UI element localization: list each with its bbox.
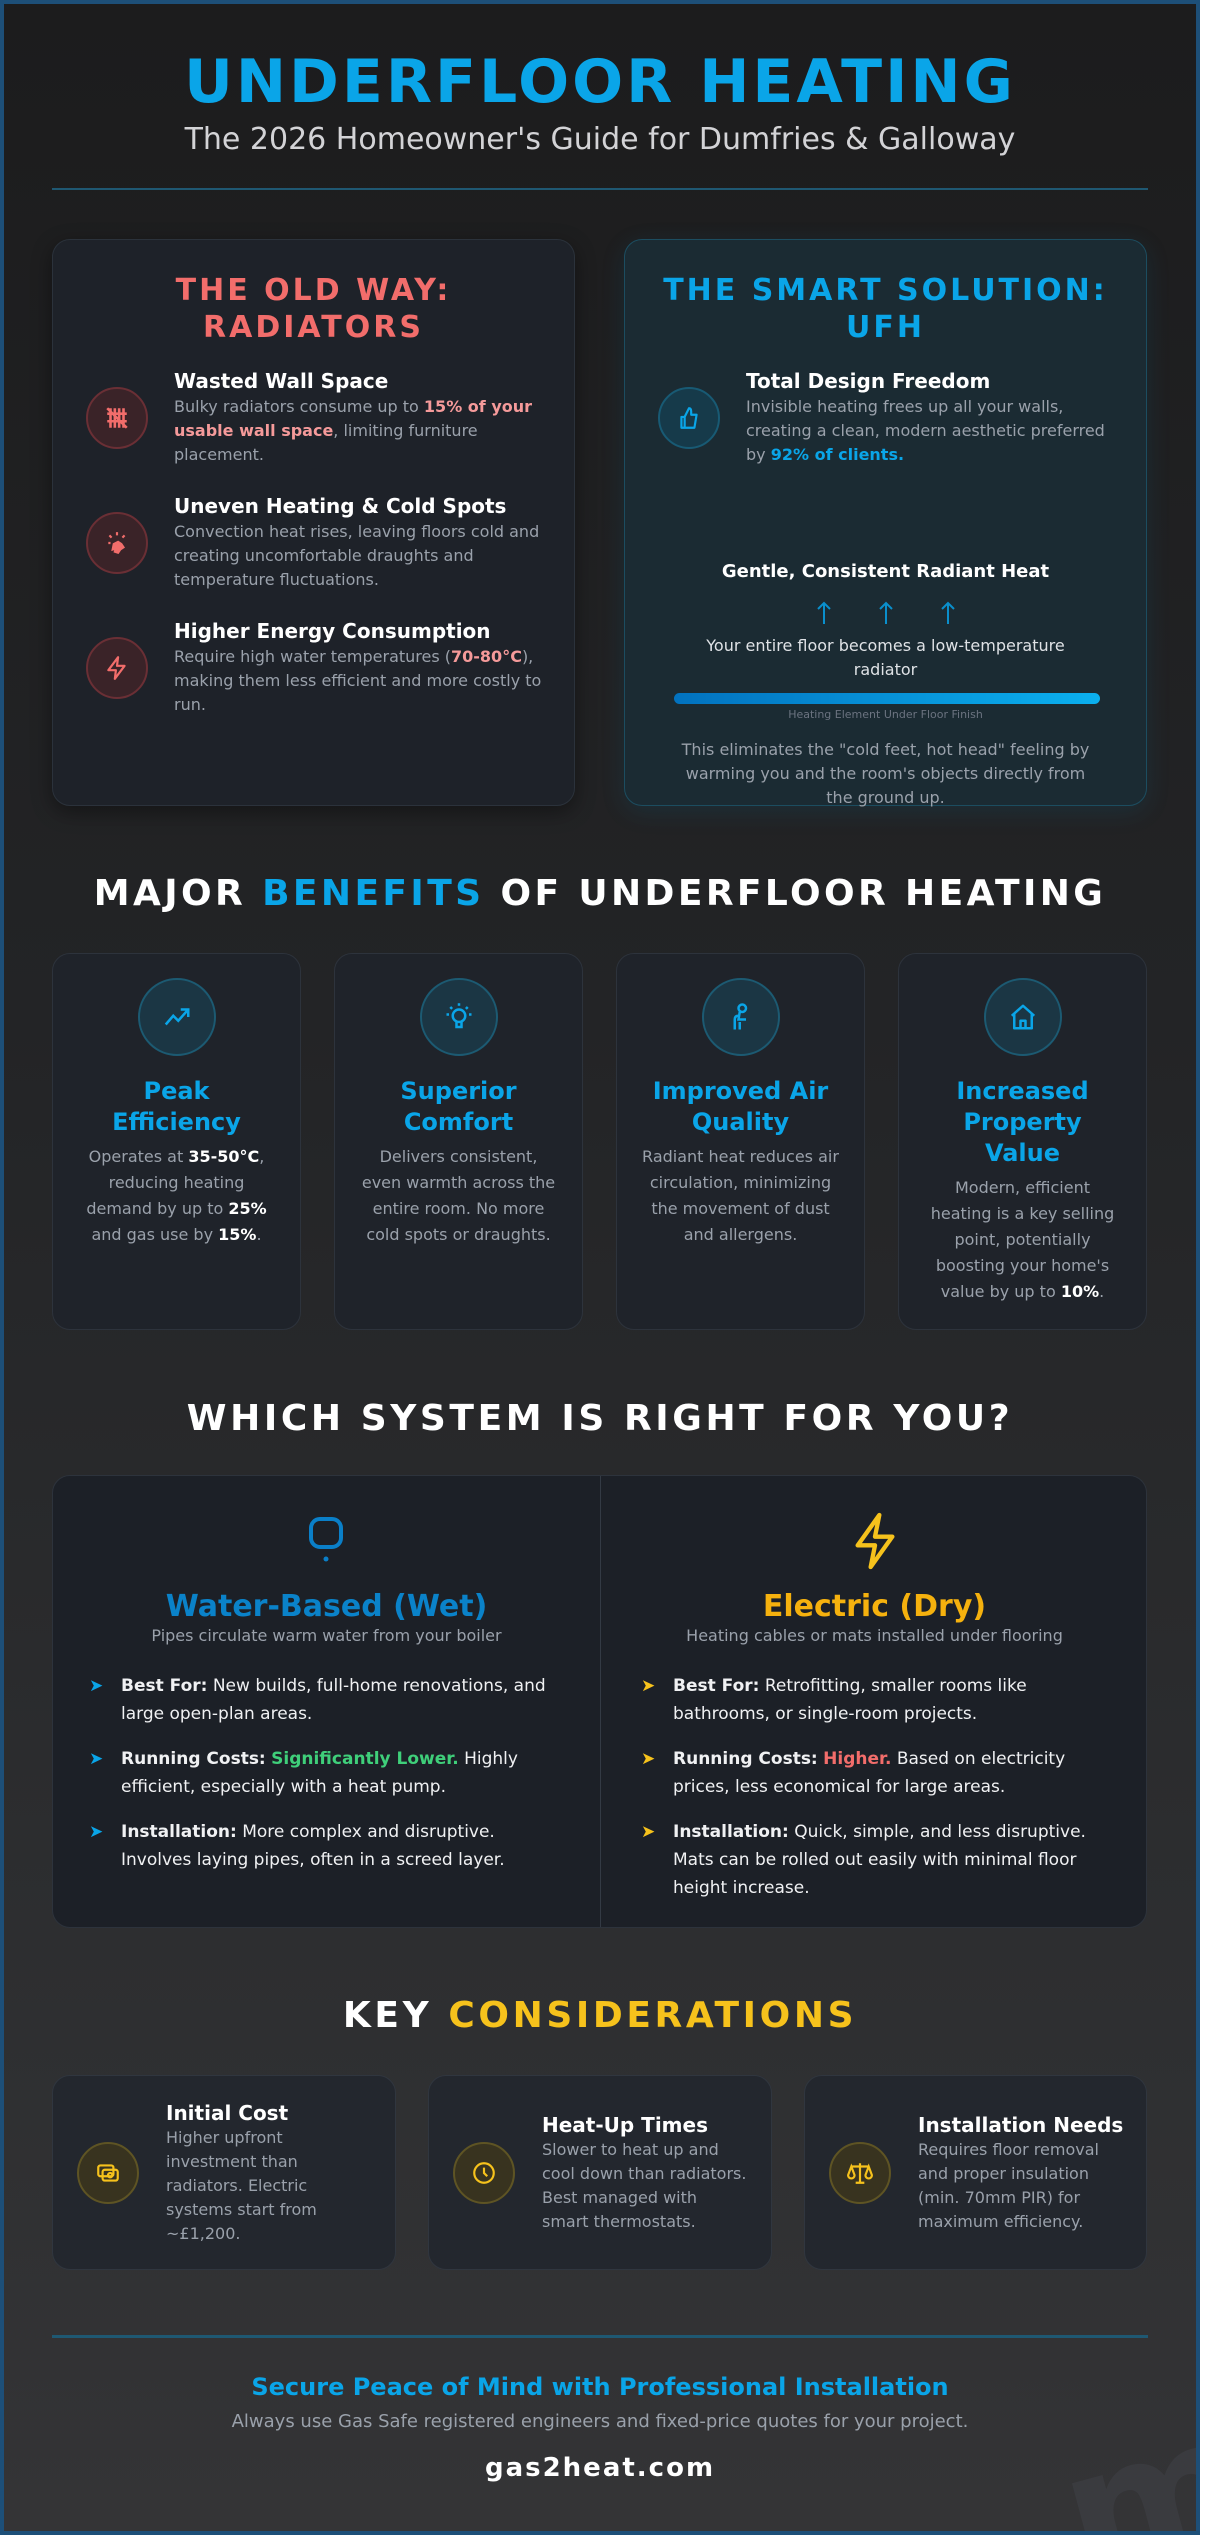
icon: house (984, 978, 1062, 1056)
icon: heat arrows (817, 602, 955, 624)
column: electric: Running Costs: Higher. Based on electricity prices, less economical for large areas. (673, 1749, 1065, 1797)
item: design freedom: Invisible heating frees up all your walls, creating a clean, modern aesthetic preferred by 92% of clients. (746, 397, 1105, 464)
card: air quality (616, 953, 865, 1330)
radiant heat diagram: Heating Element Under Floor Finish (788, 708, 983, 721)
item: uneven heating (86, 494, 539, 589)
column: electric: Installation: Quick, simple, and less disruptive. Mats can be rolled out easily with minimal floor height increase. (673, 1822, 1086, 1898)
item: design freedom: Total Design Freedom (746, 369, 990, 393)
heading: smart solution (663, 273, 1108, 345)
subtitle: The 2026 Homeowner's Guide for Dumfries & Galloway (185, 122, 1015, 157)
column: water-based: ➤ (89, 1822, 103, 1842)
icon: water (309, 1517, 343, 1562)
heading: major benefits: MAJOR BENEFITS OF UNDERFLOOR HEATING (94, 873, 1106, 914)
column: electric: Electric (Dry) (763, 1589, 986, 1624)
column: electric (641, 1512, 1086, 1898)
card: superior comfort: Superior (400, 1077, 517, 1105)
card: peak efficiency (52, 953, 301, 1330)
heading: which system: WHICH SYSTEM IS RIGHT FOR YOU? (187, 1398, 1013, 1439)
column: electric: ➤ (641, 1749, 655, 1769)
column: water-based: Water-Based (Wet) (166, 1589, 487, 1624)
card: installation needs: Installation Needs (918, 2113, 1123, 2137)
icon: person air (702, 978, 780, 1056)
card: property value: Modern, efficient heating is a key selling point, potentially boosting your home's value by up to 10%. (931, 1178, 1114, 1301)
card: superior comfort (334, 953, 583, 1330)
item: wasted wall space (86, 369, 532, 464)
heading: old way: THE OLD WAY: (176, 273, 451, 308)
radiant heat diagram: Your entire floor becomes a low-temperature radiator (706, 636, 1065, 679)
card: peak efficiency: Efficiency (112, 1108, 241, 1136)
card: heat-up times: Heat-Up Times (542, 2113, 708, 2137)
item: design freedom (658, 369, 1105, 464)
card: peak efficiency: Operates at 35-50°C, reducing heating demand by up to 25% and gas use by 15%. (86, 1147, 267, 1244)
heading: smart solution: UFH (846, 310, 925, 345)
icon: trend up (138, 978, 216, 1056)
heading: old way: RADIATORS (203, 310, 424, 345)
card: superior comfort: Comfort (404, 1108, 513, 1136)
column: water-based: Pipes circulate warm water from your boiler (151, 1626, 502, 1645)
radiant heat diagram (674, 561, 1100, 807)
panel: old way radiators (52, 239, 575, 806)
icon: lightning (86, 637, 148, 699)
item: higher energy (86, 619, 541, 714)
item: higher energy: Require high water temperatures (70-80°C), making them less efficient and more costly to run. (174, 647, 541, 714)
card: heat-up times: Slower to heat up and cool down than radiators. Best managed with smart thermostats. (542, 2140, 746, 2231)
card: property value: Value (985, 1139, 1060, 1167)
card: initial cost: Initial Cost (166, 2101, 288, 2125)
card: property value (898, 953, 1147, 1330)
item: higher energy: Higher Energy Consumption (174, 619, 491, 643)
column: electric: Best For: Retrofitting, smaller rooms like bathrooms, or single-room projects. (673, 1676, 1027, 1724)
icon: lightning (856, 1512, 894, 1570)
card: heat-up times (428, 2075, 772, 2270)
column: electric: ➤ (641, 1822, 655, 1842)
icon: clock (453, 2142, 515, 2204)
card: peak efficiency: Peak (143, 1077, 210, 1105)
card: property value: Increased (956, 1077, 1089, 1105)
column: water-based (89, 1517, 546, 1870)
icon: money (77, 2142, 139, 2204)
card: air quality: Quality (692, 1108, 789, 1136)
item: wasted wall space: Wasted Wall Space (174, 369, 388, 393)
card: initial cost (52, 2075, 396, 2270)
heading: key considerations: KEY CONSIDERATIONS (343, 1995, 857, 2036)
column: water-based: ➤ (89, 1749, 103, 1769)
card: installation needs (804, 2075, 1147, 2270)
card: initial cost: Higher upfront investment than radiators. Electric systems start from ~£1,200. (166, 2128, 317, 2243)
icon: thumbs up (658, 387, 720, 449)
icon: radiator (86, 387, 148, 449)
column: water-based: ➤ (89, 1676, 103, 1696)
icon: cold spots (86, 512, 148, 574)
card: superior comfort: Delivers consistent, even warmth across the entire room. No more cold spots or draughts. (362, 1147, 555, 1244)
panel: system comparison (52, 1475, 1147, 1928)
title: UNDERFLOOR HEATING (184, 47, 1016, 117)
icon: bulb (420, 978, 498, 1056)
footer website: gas2heat.com (485, 2453, 715, 2483)
item: uneven heating: Uneven Heating & Cold Spots (174, 494, 506, 518)
card: air quality: Radiant heat reduces air circulation, minimizing the movement of dust and allergens. (642, 1147, 839, 1244)
column: water-based: Installation: More complex and disruptive. Involves laying pipes, often in a screed layer. (121, 1822, 505, 1870)
heading: smart solution: THE SMART SOLUTION: (663, 273, 1108, 308)
radiant heat diagram: This eliminates the "cold feet, hot head" feeling by warming you and the room's objects directly from the ground up. (682, 740, 1089, 807)
heating element bar (674, 693, 1100, 704)
footer note: Always use Gas Safe registered engineers and fixed-price quotes for your project. (232, 2411, 968, 2432)
radiant heat diagram: Gentle, Consistent Radiant Heat (722, 561, 1049, 582)
card: air quality: Improved Air (653, 1077, 828, 1105)
panel: smart solution UFH (624, 239, 1147, 806)
item: uneven heating: Convection heat rises, leaving floors cold and creating uncomfortable draughts and temperature fluctuations. (174, 522, 539, 589)
column: water-based: Running Costs: Significantly Lower. Highly efficient, especially with a heat pump. (121, 1749, 518, 1797)
card: installation needs: Requires floor removal and proper insulation (min. 70mm PIR) for maximum efficiency. (918, 2140, 1099, 2231)
item: wasted wall space: Bulky radiators consume up to 15% of your usable wall space, limiting furniture placement. (174, 397, 532, 464)
column: water-based: Best For: New builds, full-home renovations, and large open-plan areas. (121, 1676, 546, 1724)
column: electric: Heating cables or mats installed under flooring (686, 1626, 1063, 1645)
heading: old way (176, 273, 451, 345)
card: property value: Property (963, 1108, 1082, 1136)
icon: scales (829, 2142, 891, 2204)
column: electric: ➤ (641, 1676, 655, 1696)
footer callout: Secure Peace of Mind with Professional Installation (251, 2373, 949, 2401)
